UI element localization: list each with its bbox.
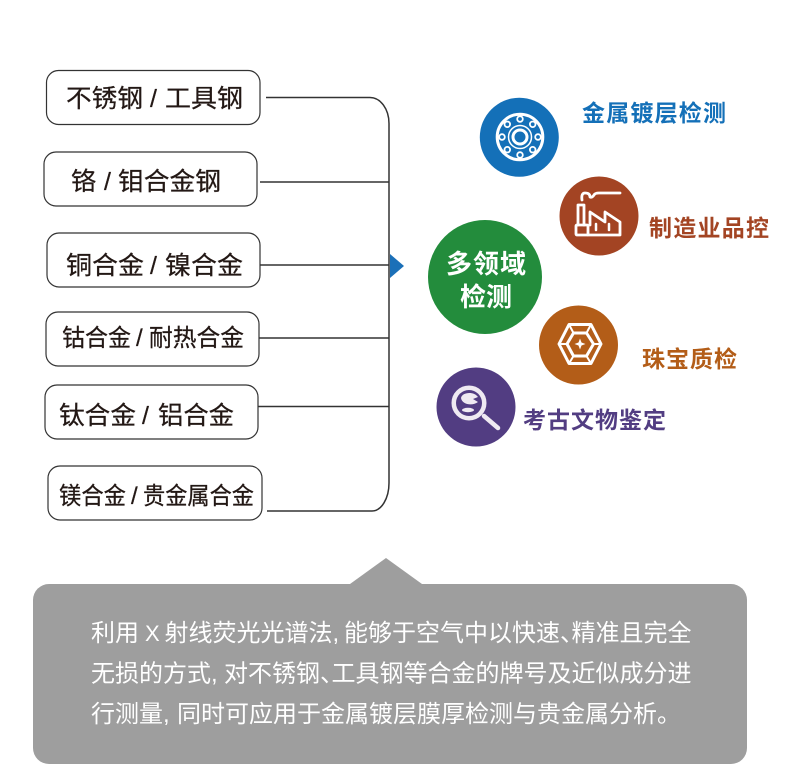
material box: copper and nickel alloy [47, 233, 260, 287]
material box: cobalt and heat resistant alloy: 耐热合金 [149, 325, 244, 352]
material box: stainless and tool steel: 不锈钢 [66, 85, 143, 113]
callout text: 无损的方式, [91, 660, 218, 688]
label: jewellery inspection: 珠宝质检 [642, 346, 737, 372]
icon: factory [560, 176, 638, 256]
material list panel [44, 70, 262, 520]
material box: magnesium and precious metal alloy [48, 466, 262, 520]
description callout [33, 558, 747, 764]
callout text: 对不锈钢、 [224, 660, 344, 688]
material box: titanium and aluminium alloy: 铝合金 [158, 402, 234, 430]
callout text: 同时可应用于金属镀层膜厚检测与贵金属分析。 [177, 701, 681, 728]
material box: copper and nickel alloy: 铜合金 [66, 252, 144, 280]
material box: chromium molybdenum steel [44, 152, 257, 206]
callout text: 行测量, [91, 701, 170, 728]
material box: copper and nickel alloy: 镍合金 [165, 252, 243, 280]
material box: titanium and aluminium alloy: 钛合金 [59, 402, 136, 430]
material box: magnesium and precious metal alloy: 镁合金 [59, 483, 126, 510]
field: archaeology and artifact appraisal [436, 368, 666, 446]
material box: titanium and aluminium alloy [45, 385, 258, 439]
bracket connector lines [258, 98, 389, 511]
arrow: to application fields [390, 254, 404, 278]
material box: stainless and tool steel: / [150, 85, 157, 113]
icon: bearing [480, 98, 559, 177]
material box: magnesium and precious metal alloy: 贵金属合金 [143, 483, 254, 510]
material box: chromium molybdenum steel: 钼合金钢 [118, 168, 221, 196]
material box: titanium and aluminium alloy: / [142, 402, 149, 430]
callout text: 利用 [91, 620, 139, 647]
material box: stainless and tool steel: 工具钢 [165, 85, 243, 113]
material box: copper and nickel alloy: / [150, 252, 157, 280]
material box: cobalt and heat resistant alloy [46, 312, 259, 366]
label: archaeology and artifact appraisal: 考古文物鉴定 [523, 407, 666, 433]
material box: stainless and tool steel [46, 70, 260, 124]
callout text: 射线荧光光谱法, [164, 620, 339, 647]
field: manufacturing quality control [560, 176, 769, 256]
callout text: 工具钢等合金的牌号及近似成分进 [332, 660, 692, 688]
callout text: 能够于空气中以快速、 [344, 620, 584, 647]
callout text: 精准且完全 [572, 620, 692, 647]
material box: chromium molybdenum steel: 铬 [71, 168, 96, 196]
field: metal coating testing [480, 98, 726, 177]
label: manufacturing quality control: 制造业品控 [649, 215, 769, 241]
callout text [91, 620, 692, 728]
material box: chromium molybdenum steel: / [104, 168, 111, 196]
central circle: multi-field testing: 检测 [460, 282, 512, 312]
material box: magnesium and precious metal alloy: / [131, 483, 138, 510]
central circle: multi-field testing: 多领域 [446, 249, 526, 279]
material box: cobalt and heat resistant alloy: / [136, 325, 143, 352]
central circle: multi-field testing [428, 220, 542, 334]
material box: cobalt and heat resistant alloy: 钴合金 [62, 325, 131, 352]
callout panel [33, 584, 747, 764]
field: jewellery inspection [539, 306, 737, 384]
label: metal coating testing: 金属镀层检测 [582, 100, 726, 126]
icon: gem [539, 306, 618, 384]
callout pointer [350, 558, 422, 584]
icon: magnifier [436, 368, 516, 446]
callout text: X [145, 621, 160, 646]
